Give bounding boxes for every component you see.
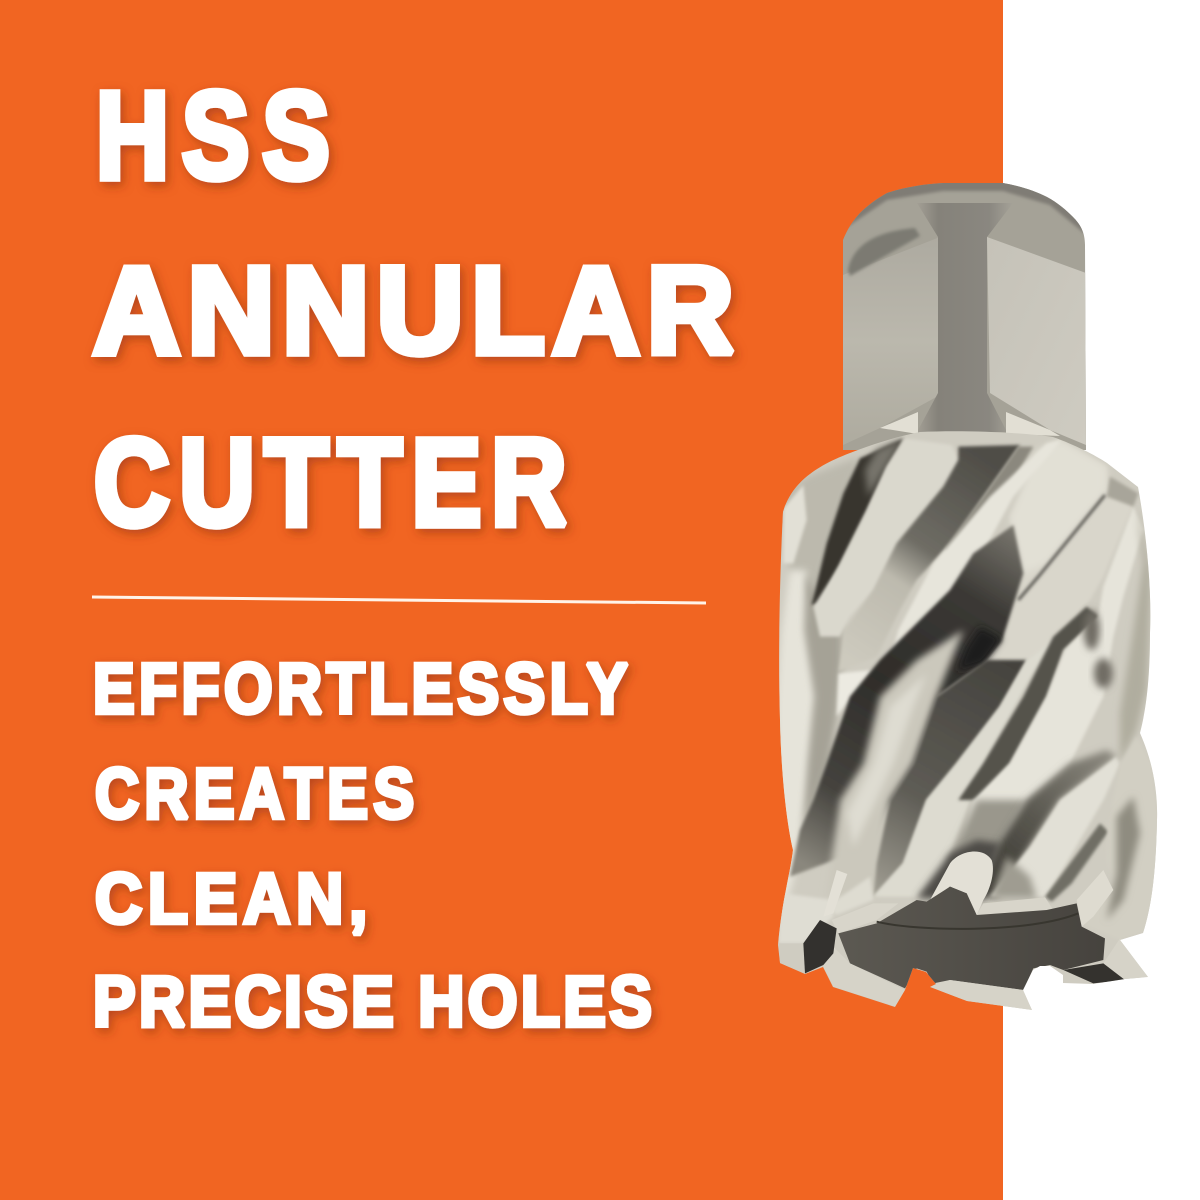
subtitle: Effortlessly creates clean, precise holes [93, 649, 652, 1042]
product image: annular cutter [770, 180, 1170, 1025]
left pale strip [779, 566, 814, 914]
lower pale land [990, 757, 1120, 897]
bright land [970, 509, 1143, 814]
blurred shadows on land [1084, 610, 1100, 650]
divider line [92, 597, 706, 603]
grey facet beside ridge [945, 447, 1033, 558]
streaky grey lower band [947, 800, 1027, 863]
pale triangle [837, 670, 873, 717]
subtitle: Effortlessly creates clean, precise holes: CREATES [95, 755, 414, 834]
title: HSS Annular Cutter: CUTTER [94, 415, 567, 552]
subtitle: Effortlessly creates clean, precise holes: PRECISE HOLES [93, 963, 652, 1042]
dark core [957, 627, 1002, 672]
tooth bumps [930, 852, 993, 915]
cutter body with spiral flutes [770, 425, 1170, 1025]
lower dark flute [977, 750, 1117, 897]
title: HSS Annular Cutter [93, 66, 734, 552]
right strips [1120, 507, 1152, 763]
subtitle: Effortlessly creates clean, precise holes: CLEAN, [95, 860, 367, 939]
pale land beside parallelogram [873, 638, 1053, 897]
cutting teeth [850, 963, 905, 1006]
cutting face [838, 887, 1105, 990]
upper pale land [993, 498, 1130, 659]
hatched flute [838, 445, 1020, 672]
land B [813, 438, 958, 637]
left shoulder facet [782, 459, 857, 588]
bright ridge [894, 442, 1057, 645]
subtitle: Effortlessly creates clean, precise holes: EFFORTLESSLY [93, 649, 628, 729]
title: HSS Annular Cutter: HSS [96, 66, 330, 204]
lighter band in flute [827, 628, 966, 862]
hatched dark central parallelogram [873, 660, 1027, 897]
main dark flute [790, 525, 1023, 877]
shadow behind bump [917, 840, 1000, 900]
dark streak [958, 607, 1098, 800]
lower section of cutter with teeth [778, 840, 1148, 1010]
cutter shank [840, 180, 1090, 455]
title: HSS Annular Cutter: ANNULAR [93, 242, 734, 379]
dark flute A [812, 438, 903, 605]
left mid strip [803, 573, 842, 830]
rim highlights [832, 903, 898, 933]
